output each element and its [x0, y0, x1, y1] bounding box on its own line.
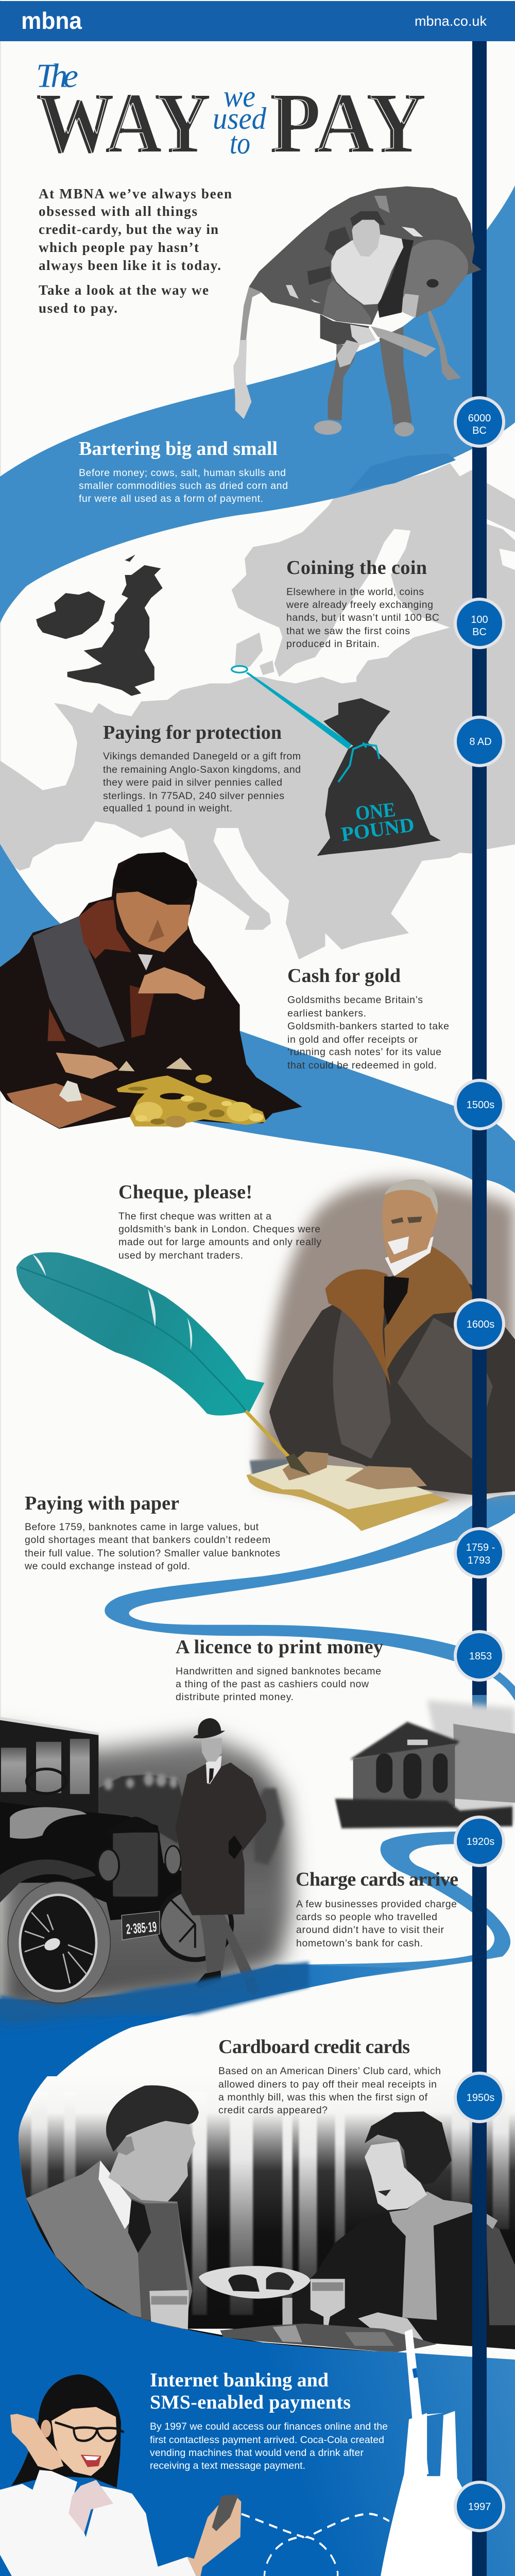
header bar	[0, 1, 515, 41]
marker 6000 BC: BC	[472, 425, 487, 436]
text: paying for protection: sterlings. In 775AD, 240 silver pennies	[103, 790, 284, 802]
text: internet banking and SMS payments: Internet banking and	[150, 2369, 329, 2391]
text: cash for gold: Goldsmith-bankers started to take	[287, 1021, 449, 1032]
text: internet banking and SMS payments: first contactless payment arrived. Coca-Cola created	[150, 2434, 384, 2446]
woman at table	[289, 2111, 515, 2349]
header bar: mbna.co.uk	[415, 13, 487, 29]
silhouette of Britain and Ireland	[36, 554, 163, 696]
title: PAY	[270, 75, 426, 171]
text: paying for protection: Vikings demanded Danegeld or a gift from	[103, 751, 301, 762]
photo: old bank building	[335, 1700, 515, 1828]
text: coining the coin: Elsewhere in the world, coins	[286, 586, 424, 598]
text: cash for gold: earliest bankers.	[287, 1008, 366, 1019]
marker 8 AD	[455, 717, 504, 766]
white milk bottle with straw	[373, 2329, 472, 2576]
intro text: Take a look at the way we	[39, 282, 209, 298]
text: internet banking and SMS payments: vending machines that would vend a drink after	[150, 2447, 364, 2459]
intro text: credit-cardy, but the way in	[39, 222, 218, 237]
intro text: always been like it is today.	[39, 258, 221, 273]
marker 1600s: 1600s	[467, 1319, 494, 1330]
title: used	[213, 101, 267, 135]
marker 1600s	[455, 1300, 504, 1348]
license plate	[122, 1911, 160, 1940]
text: cheque please: used by merchant traders.	[118, 1250, 243, 1261]
title: we	[224, 79, 255, 113]
marker 100 BC: BC	[472, 626, 487, 638]
photo: woman holding phone	[0, 2375, 241, 2576]
text: cardboard credit cards: allowed diners to pay off their meal receipts in	[218, 2079, 437, 2090]
man's shirt	[331, 234, 403, 305]
text: paying for protection: they were paid in silver pennies called	[103, 777, 282, 788]
text: cash for gold: ‘running cash notes’ for its value	[287, 1046, 441, 1058]
text: coining the coin: Coining the coin	[286, 557, 427, 579]
text: charge cards arrive: A few businesses provided charge	[296, 1899, 457, 1910]
marker 1500s: 1500s	[467, 1099, 494, 1111]
text: coining the coin	[286, 557, 439, 650]
text: cheque please: Cheque, please!	[118, 1181, 252, 1203]
marker 1997	[455, 2482, 504, 2531]
dashed text-message path	[242, 2514, 389, 2576]
blue wave: bartering	[0, 185, 515, 623]
text: licence to print money: A licence to print money	[176, 1636, 383, 1658]
timeline bar	[472, 41, 487, 2576]
text: cheque please: The first cheque was written at a	[118, 1211, 271, 1222]
blue road tint	[0, 1962, 309, 2016]
feather quill	[16, 1252, 311, 1475]
man at table	[26, 2086, 199, 2330]
title: WAY	[36, 75, 211, 171]
text: licence to print money: Handwritten and signed banknotes became	[176, 1666, 381, 1677]
title: to	[230, 126, 250, 160]
cow hind leg across arm	[323, 280, 371, 325]
title	[36, 57, 426, 171]
map of Europe	[0, 463, 515, 959]
text: charge cards arrive	[296, 1869, 458, 1949]
text: licence to print money	[176, 1636, 383, 1703]
intro text: obsessed with all things	[39, 204, 197, 219]
marker 1920s	[455, 1817, 504, 1866]
bag text	[340, 798, 416, 846]
text: cardboard credit cards: a monthly bill, was this when the first sign of	[218, 2092, 428, 2103]
cow body	[249, 187, 482, 325]
bag text: POUND	[340, 813, 416, 846]
text: cardboard credit cards: credit cards appeared?	[218, 2105, 328, 2116]
text: coining the coin: that we saw the first coins	[286, 625, 410, 637]
plate and glasses	[149, 2266, 345, 2330]
pile of gold coins	[116, 1075, 266, 1127]
text: cheque please: made out for large amounts and only really	[118, 1236, 321, 1248]
ring and line pointer	[232, 666, 352, 749]
text: cash for gold: that could be redeemed in gold.	[287, 1060, 437, 1071]
portrait: gentleman with fur collar	[246, 1179, 515, 1531]
photo: diners at restaurant table	[13, 2075, 515, 2366]
header bar: mbna	[21, 7, 82, 34]
text: bartering big and small: Bartering big and small	[79, 438, 278, 460]
photo: Ford and Model T car	[0, 1717, 309, 2016]
text: internet banking and SMS payments: By 1997 we could access our finances online and the	[150, 2421, 388, 2432]
map tint on wave	[348, 453, 456, 492]
bag shape	[317, 698, 441, 856]
curtain stripes	[31, 2092, 509, 2315]
blue wave: cash for gold	[0, 844, 515, 1193]
text: cash for gold: in gold and offer receipts or	[287, 1034, 418, 1045]
text: internet banking and SMS payments: receiving a text message payment.	[150, 2460, 305, 2471]
photo: Ford and Model T car: 2·385·19	[126, 1919, 157, 1937]
car body	[0, 1802, 183, 1920]
cow head	[398, 240, 468, 318]
front wheel	[8, 1882, 110, 2003]
text: coining the coin: hands, but it wasn’t until 100 BC	[286, 612, 439, 623]
marker 1853	[455, 1632, 504, 1680]
marker 1997: 1997	[468, 2501, 491, 2513]
text: coining the coin: produced in Britain.	[286, 638, 380, 650]
crowd behind the car	[98, 1772, 284, 1865]
text: internet banking and SMS payments: SMS-enabled payments	[150, 2392, 351, 2413]
text: paying with paper	[24, 1493, 280, 1572]
timeline markers	[455, 398, 504, 2576]
text: paying for protection: Paying for protection	[103, 722, 282, 743]
far wheel	[159, 1889, 232, 1960]
text: paying with paper: Before 1759, banknotes came in large values, but	[25, 1521, 259, 1533]
cow legs held by man	[371, 326, 436, 357]
man in bowler hat	[176, 1718, 266, 1995]
title: The	[36, 57, 78, 95]
text: cardboard credit cards	[218, 2036, 441, 2116]
ribbon: paying with paper	[105, 1495, 515, 1701]
text: charge cards arrive: hometown’s bank for cash.	[296, 1938, 423, 1949]
text: paying for protection	[103, 722, 301, 814]
ribbon: charge cards	[230, 1832, 510, 2004]
text: cash for gold: Goldsmiths became Britain’s	[287, 994, 423, 1006]
text: charge cards arrive: cards so people who travelled	[296, 1911, 437, 1923]
text: internet banking and SMS payments	[150, 2369, 388, 2471]
cow tail	[233, 287, 263, 419]
marker 1759 - 1793	[455, 1529, 504, 1577]
text: paying with paper: their full value. The solution? Smaller value banknotes	[25, 1548, 280, 1559]
text: bartering big and small: fur were all used as a form of payment.	[79, 493, 263, 504]
man's trousers	[328, 326, 412, 424]
deep blue section	[0, 1964, 515, 2576]
text: charge cards arrive: Charge cards arrive	[296, 1869, 458, 1890]
text: cash for gold	[287, 965, 449, 1071]
text: paying for protection: equalled 1 pound in weight.	[103, 803, 232, 814]
marker 6000 BC	[455, 398, 504, 446]
marker 1950s: 1950s	[467, 2092, 494, 2104]
marker 100 BC	[455, 599, 504, 648]
marker 1950s	[455, 2073, 504, 2122]
text: bartering big and small: smaller commodities such as dried corn and	[79, 480, 288, 492]
marker 100 BC: 100	[471, 614, 488, 625]
text: paying with paper: gold shortages meant that bankers couldn’t redeem	[25, 1534, 270, 1546]
text: cheque please: goldsmith’s bank in London. Cheques were	[118, 1224, 320, 1235]
text: cardboard credit cards: Based on an American Diners’ Club card, which	[218, 2065, 441, 2077]
text: cash for gold: Cash for gold	[287, 965, 401, 987]
text: licence to print money: a thing of the past as cashiers could now	[176, 1679, 369, 1690]
text: paying with paper: we could exchange instead of gold.	[24, 1561, 190, 1572]
text: charge cards arrive: around didn’t have to visit their	[296, 1924, 444, 1936]
marker 1759 - 1793: 1759 -	[466, 1542, 495, 1553]
text: cheque please	[118, 1181, 321, 1261]
painting: goldsmith counting coins	[0, 852, 302, 1129]
marker 1853: 1853	[469, 1651, 492, 1662]
intro text: used to pay.	[39, 300, 117, 316]
cow far leg	[427, 309, 461, 380]
marker 8 AD: 8 AD	[469, 736, 492, 748]
text: bartering big and small	[79, 438, 288, 504]
man's head	[352, 215, 380, 257]
text: paying with paper: Paying with paper	[25, 1493, 179, 1514]
text: licence to print money: distribute printed money.	[176, 1691, 294, 1703]
bag text: ONE	[354, 798, 397, 825]
money bag icon with ONE POUND label	[232, 666, 441, 856]
marker 1759 - 1793: 1793	[468, 1555, 490, 1566]
dark cow neck	[377, 239, 414, 318]
intro text: At MBNA we’ve always been	[39, 186, 232, 201]
text: cardboard credit cards: Cardboard credit cards	[218, 2036, 410, 2058]
intro text: which people pay hasn’t	[39, 240, 199, 255]
text: paying for protection: the remaining Anglo-Saxon kingdoms, and	[103, 764, 301, 775]
photo: man carrying cow	[233, 187, 482, 436]
intro text	[39, 186, 232, 316]
car cab	[0, 1717, 98, 1816]
text: bartering big and small: Before money; cows, salt, human skulls and	[79, 467, 286, 479]
text: coining the coin: were already freely exchanging	[286, 599, 433, 611]
marker 6000 BC: 6000	[468, 413, 491, 424]
table with food	[187, 2324, 515, 2361]
marker 1500s	[455, 1080, 504, 1129]
marker 1920s: 1920s	[467, 1836, 494, 1848]
